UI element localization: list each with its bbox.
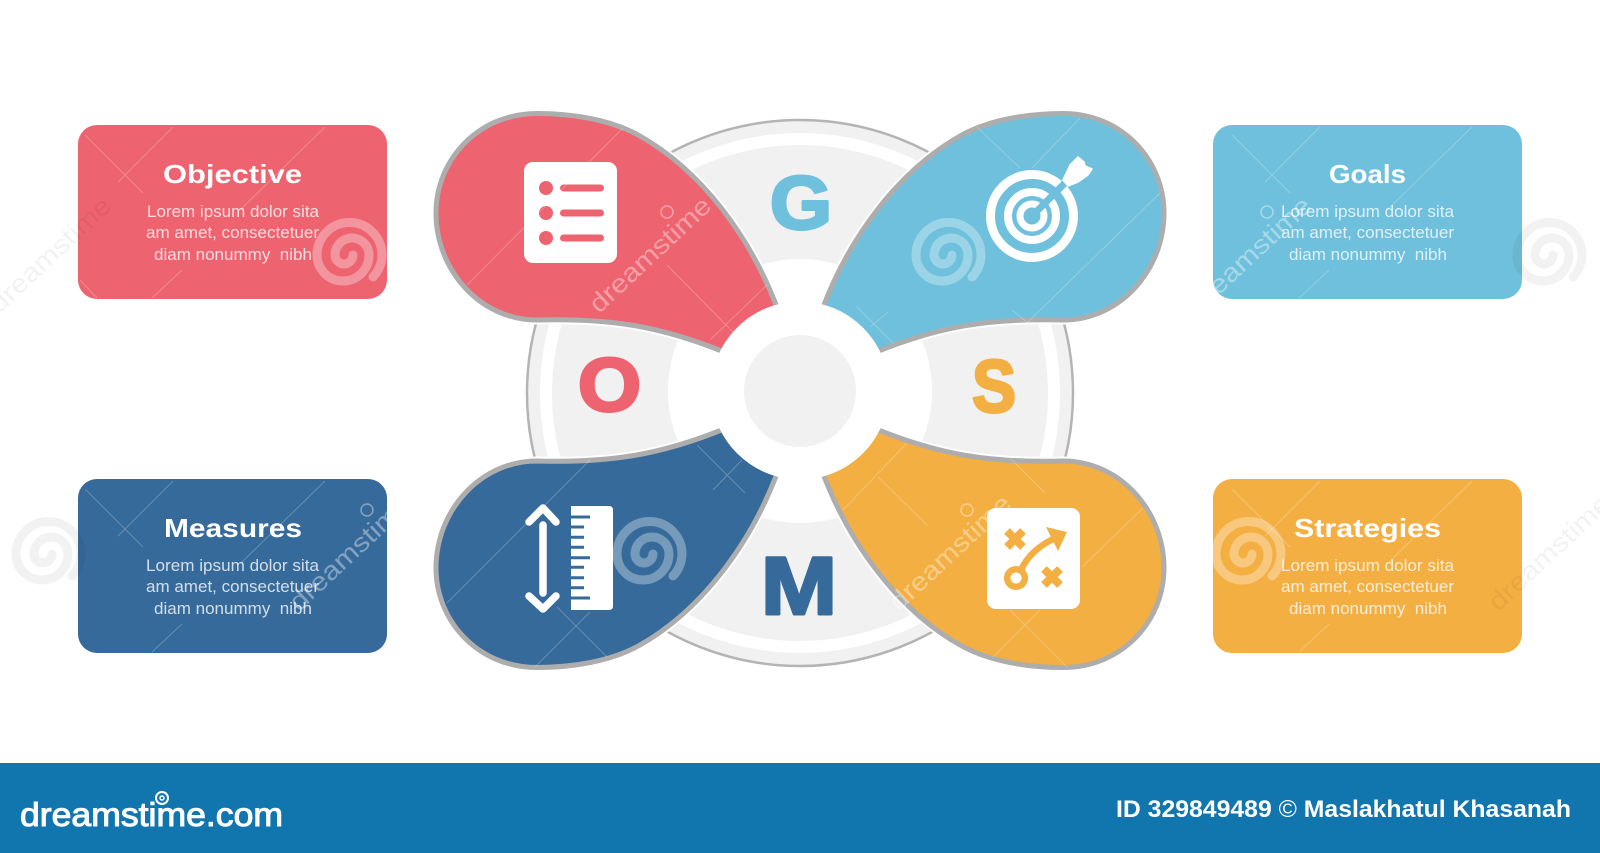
watermark: dreamstime [883, 488, 1017, 617]
text block: Objective description [146, 203, 320, 264]
text block: Measures description [146, 557, 320, 618]
petal: Goals [822, 114, 1164, 352]
text block: Strategies description [1281, 557, 1455, 618]
hub [711, 302, 889, 480]
icon: checklist [524, 162, 617, 263]
letter O: O [578, 343, 641, 427]
footer logo: dreamstime.com [20, 796, 283, 833]
heading: Strategies: Strategies [1294, 513, 1441, 543]
icon: target with arrow [990, 157, 1092, 258]
petal: Measures [436, 429, 778, 668]
watermark: dreamstime [1183, 190, 1317, 319]
text block: Goals description [1281, 203, 1455, 264]
text block: Goals description: am amet, consectetuer [1281, 224, 1455, 242]
footer credit: ID 329849489 © Maslakhatul Khasanah [1116, 796, 1571, 823]
watermark [0, 118, 1600, 667]
petal: Objective [436, 114, 778, 352]
text block: Goals description: Lorem ipsum dolor sita [1281, 203, 1455, 221]
panel: Measures [78, 479, 387, 653]
heading: Objective: Objective [163, 159, 302, 189]
heading: Measures: Measures [164, 513, 302, 543]
text block: Measures description: Lorem ipsum dolor sita [146, 557, 320, 575]
panel: Goals [1213, 125, 1522, 299]
heading: Goals: Goals [1329, 159, 1406, 189]
petal: Strategies [822, 429, 1164, 668]
text block: Objective description: Lorem ipsum dolor sita [147, 203, 320, 221]
text block: Objective description: am amet, consectetuer [146, 224, 320, 242]
letter G: G [770, 161, 832, 245]
icon: strategy play [987, 508, 1080, 609]
text block: Strategies description: Lorem ipsum dolor sita [1281, 557, 1455, 575]
text block: Objective description: diam nonummy nibh [154, 246, 312, 264]
central disk [527, 120, 1073, 666]
text block: Strategies description: diam nonummy nibh [1289, 600, 1447, 618]
watermark: dreamstime [283, 488, 417, 617]
letter S: S [972, 345, 1016, 428]
text block: Goals description: diam nonummy nibh [1289, 246, 1447, 264]
panel: Objective [78, 125, 387, 299]
icon: ruler with double arrow [529, 506, 613, 610]
text block: Strategies description: am amet, consectetuer [1281, 578, 1455, 596]
watermark: dreamstime [1482, 488, 1600, 617]
text block: Measures description: am amet, consectetuer [146, 578, 320, 596]
footer bar [0, 763, 1600, 853]
panel: Strategies [1213, 479, 1522, 653]
watermark: dreamstime [583, 190, 717, 319]
letter M: M [761, 541, 837, 632]
text block: Measures description: diam nonummy nibh [154, 600, 312, 618]
